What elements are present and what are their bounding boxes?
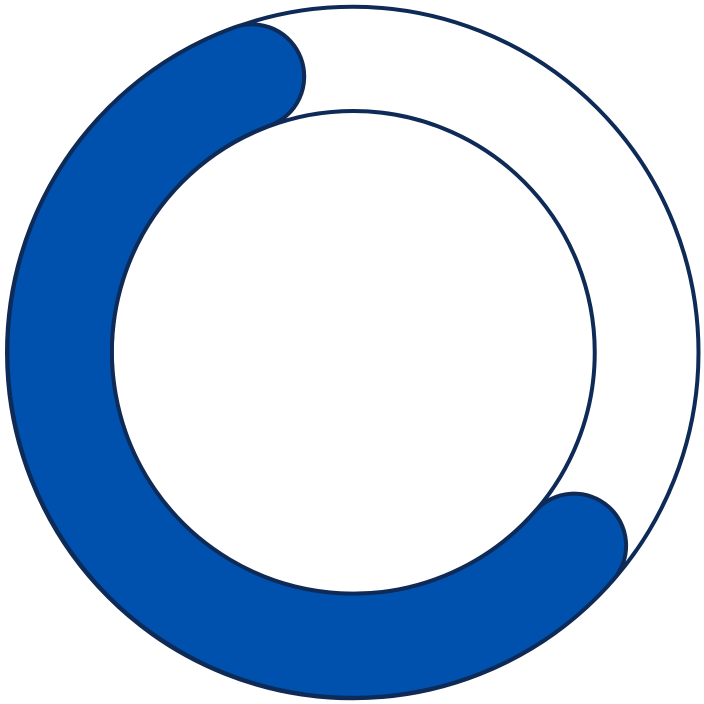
inner ring outline <box>112 111 595 594</box>
